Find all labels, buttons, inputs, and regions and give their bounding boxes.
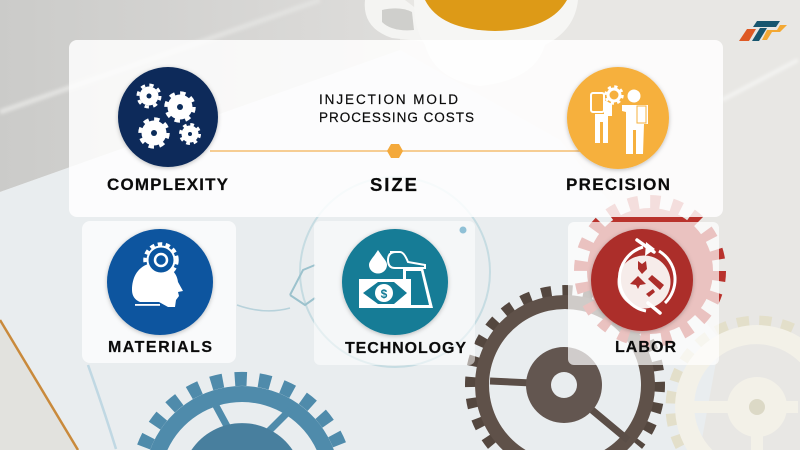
technology badge	[342, 229, 448, 335]
materials card	[82, 221, 236, 363]
coffee cup	[365, 0, 578, 86]
complexity label: COMPLEXITY	[107, 175, 229, 194]
labor badge	[591, 229, 693, 331]
precision badge	[567, 67, 669, 169]
title	[319, 92, 474, 125]
title: INJECTION MOLD	[319, 92, 458, 107]
complexity badge	[118, 67, 218, 167]
blue gear	[144, 379, 340, 450]
diamond marker	[387, 144, 403, 158]
white gear	[672, 322, 800, 450]
icon: gears	[138, 85, 200, 147]
materials badge	[107, 229, 213, 335]
icon: oil drop, factory and money: $	[381, 287, 388, 301]
red gear behind labor badge	[581, 202, 719, 340]
technology label: TECHNOLOGY	[345, 340, 466, 357]
main panel	[69, 40, 723, 217]
logo	[739, 21, 787, 41]
labor card	[568, 222, 719, 365]
technology card	[314, 221, 475, 365]
dot	[460, 226, 466, 234]
title: PROCESSING COSTS	[319, 110, 474, 125]
connector line	[210, 150, 580, 152]
labor label: LABOR	[615, 339, 676, 356]
brown gear	[471, 291, 659, 450]
icon: head with gear	[132, 244, 183, 307]
materials label: MATERIALS	[108, 339, 212, 356]
precision label: PRECISION	[566, 175, 670, 194]
icon: workers with gear	[591, 86, 648, 154]
icon: cycle with tools	[618, 240, 675, 313]
size label: SIZE	[370, 174, 417, 195]
